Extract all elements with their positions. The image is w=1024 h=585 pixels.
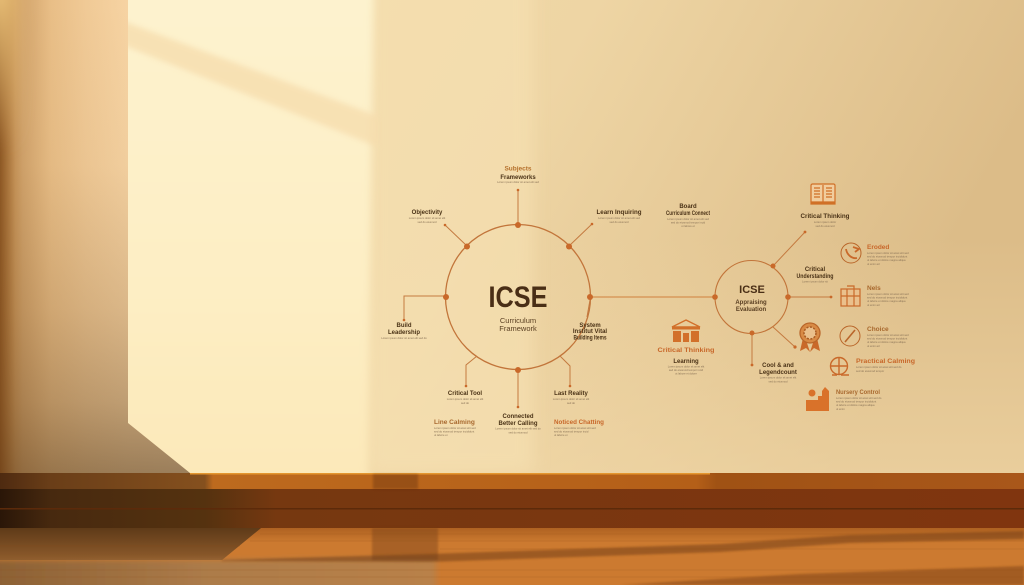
label: last reality: sed do [567, 401, 576, 405]
label: practical calming: sed do eiusmod tempor [856, 369, 884, 373]
label: learn inquiring: Learn Inquiring [596, 210, 642, 216]
icon: book [811, 184, 835, 204]
label: noticed chatting: Noticed Chatting [554, 419, 604, 426]
main circle [446, 224, 590, 370]
label: critical learning [796, 267, 834, 284]
label: critical learning: Understanding [796, 274, 834, 280]
label: subjects [497, 166, 539, 184]
label: board curriculum: Curriculum Connect [666, 211, 710, 217]
label: eroded [867, 244, 909, 266]
label: eroded: ut labore et dolore magna aliqua [867, 258, 906, 262]
label: line calming: Lorem ipsum dolor sit amet elit sed [434, 426, 476, 430]
label: cool and legacy: Lorem ipsum dolor sit amet elit [760, 376, 797, 380]
label: cool and legacy [759, 363, 797, 384]
icon: person and tower [806, 387, 829, 411]
shadowed left wall [0, 0, 190, 473]
label: nursery control: ut labore et dolore magna aliqua [836, 403, 875, 407]
label: nels: Lorem ipsum dolor sit amet elit sed [867, 292, 909, 296]
label: critical thinking: Critical Thinking [800, 214, 850, 220]
label: eroded: Lorem ipsum dolor sit amet elit sed [867, 251, 909, 255]
label: nels: sed do eiusmod tempor incididunt [867, 296, 907, 300]
label: practical calming: Practical Calming [856, 358, 915, 365]
label: eroded: sed do eiusmod tempor incididunt [867, 254, 907, 258]
label: critical tool: Lorem ipsum dolor sit amet elit [447, 397, 484, 401]
label: critical thinking learning: Learning [673, 359, 699, 365]
main subtitle: Curriculum [500, 316, 536, 325]
label: nursery control: sed do eiusmod tempor incididunt [836, 400, 876, 404]
label: last reality [553, 391, 590, 405]
label: eroded: ut enim ad [867, 262, 880, 266]
label: objectivity: Lorem ipsum dolor sit amet elit [409, 216, 446, 220]
label: critical thinking learning: Critical Thinking [658, 347, 715, 354]
label: board curriculum: Board [679, 204, 697, 210]
label: critical thinking learning: ut labore et dolore [675, 372, 697, 376]
icon: pencil circle [840, 326, 860, 346]
label: eroded: Eroded [867, 244, 889, 251]
sunlight patch on wall [100, 0, 378, 490]
label: nels: ut labore et dolore magna aliqua [867, 299, 906, 303]
label: nursery control: Nursery Control [836, 389, 880, 396]
label: noticed chatting: Lorem ipsum dolor sit amet elit sed [554, 426, 596, 430]
label: choice: sed do eiusmod tempor incididunt [867, 336, 907, 340]
label: build leadership [381, 323, 427, 340]
secondary nodes [712, 231, 832, 366]
label: last reality: Last Reality [554, 391, 588, 397]
label: line calming: Line Calming [434, 419, 475, 426]
label: subjects: Frameworks [500, 175, 536, 181]
icon: dial [841, 243, 861, 263]
label: critical thinking [800, 214, 850, 228]
secondary circle [715, 260, 788, 334]
label: subjects: Lorem ipsum dolor sit amet elit sed [497, 180, 539, 184]
label: critical learning: Lorem ipsum dolor sit [802, 280, 828, 284]
label: system institute: Institut Vital [573, 329, 607, 335]
label: choice: ut labore et dolore magna aliqua [867, 340, 906, 344]
secondary subtitle [735, 300, 767, 313]
wooden floor [0, 528, 1024, 585]
label: learn inquiring: Lorem ipsum dolor sit amet elit sed [598, 216, 640, 220]
label: line calming: ut labore et [434, 433, 448, 437]
label: connected better calling: Better Calling [498, 421, 538, 427]
label: cool and legacy: Cool & and [762, 363, 794, 369]
secondary title: ICSE [739, 284, 765, 296]
label: nels [867, 285, 909, 307]
label: critical thinking learning: Lorem ipsum dolor sit amet elit [668, 364, 705, 368]
icon: globe [830, 358, 849, 375]
label: choice: ut enim ad [867, 344, 880, 348]
label: choice: Lorem ipsum dolor sit amet elit sed [867, 333, 909, 337]
label: connected better calling: Lorem ipsum dolor sit amet elit sed do [495, 426, 541, 430]
icon: ribbon badge [800, 323, 820, 352]
label: cool and legacy: sed do eiusmod [769, 380, 788, 384]
label: board curriculum: Lorem ipsum dolor sit amet elit sed [667, 217, 709, 221]
label: connected better calling: sed do eiusmod [509, 430, 528, 434]
label: choice [867, 326, 909, 348]
connector spokes [404, 190, 715, 407]
label: cool and legacy: Legendcount [759, 370, 797, 376]
label: system institute: Building Items [574, 336, 607, 342]
main title: ICSE [488, 281, 548, 314]
label: board curriculum [666, 204, 710, 228]
diagram: main ICSE curriculum framework [381, 166, 715, 437]
label: build leadership: Build [396, 323, 412, 329]
label: board curriculum: sed do eiusmod tempor incid [671, 220, 706, 224]
label: learn inquiring [596, 210, 642, 224]
label: nels: ut enim ad [867, 303, 880, 307]
label: noticed chatting: ut labore et [554, 433, 568, 437]
secondary connectors [752, 232, 831, 365]
label: critical thinking learning [658, 347, 715, 376]
label: line calming: sed do eiusmod tempor incididunt [434, 430, 474, 434]
main subtitle [499, 316, 537, 333]
label: nursery control: Lorem ipsum dolor sit amet elit sed do [836, 396, 882, 400]
label: critical tool: sed do [461, 401, 470, 405]
label: objectivity [409, 210, 446, 224]
label: nursery control [836, 389, 882, 411]
label: critical tool [447, 391, 484, 405]
baseboard [0, 473, 1024, 528]
label: critical thinking: Lorem ipsum dolor [814, 220, 836, 224]
secondary subtitle: Appraising [735, 300, 767, 306]
connector nodes [403, 189, 593, 408]
label: noticed chatting [554, 419, 604, 437]
icon: building [841, 286, 860, 306]
diagram: secondary ICSE assessment framework [658, 184, 915, 411]
label: objectivity: sed do eiusmod [418, 220, 437, 224]
label: practical calming [856, 358, 915, 373]
label: nels: Nels [867, 285, 881, 292]
label: build leadership: Lorem ipsum dolor sit amet elit sed do [381, 336, 427, 340]
label: system institute: System [579, 323, 601, 329]
label: critical thinking: sed do eiusmod [816, 224, 835, 228]
secondary subtitle: Evaluation [736, 307, 767, 313]
label: practical calming: Lorem ipsum dolor sit amet elit sed do [856, 365, 902, 369]
label: nursery control: ut enim [836, 407, 846, 411]
label: critical thinking learning: sed do eiusmod tempor incid [669, 368, 704, 372]
label: connected better calling [495, 414, 541, 434]
label: build leadership: Leadership [388, 330, 420, 336]
label: critical learning: Critical [805, 267, 826, 273]
label: line calming [434, 419, 476, 437]
main subtitle: Framework [499, 324, 537, 333]
label: board curriculum: ut labore et [681, 224, 695, 228]
label: noticed chatting: sed do eiusmod tempor incid [554, 430, 589, 434]
label: connected better calling: Connected [502, 414, 534, 420]
label: subjects: Subjects [504, 166, 532, 172]
label: critical tool: Critical Tool [448, 391, 482, 397]
label: learn inquiring: sed do eiusmod [610, 220, 629, 224]
icon: institution [672, 320, 700, 342]
label: objectivity: Objectivity [412, 210, 443, 216]
label: last reality: Lorem ipsum dolor sit amet elit [553, 397, 590, 401]
label: choice: Choice [867, 326, 889, 333]
label: system institute [573, 323, 607, 342]
